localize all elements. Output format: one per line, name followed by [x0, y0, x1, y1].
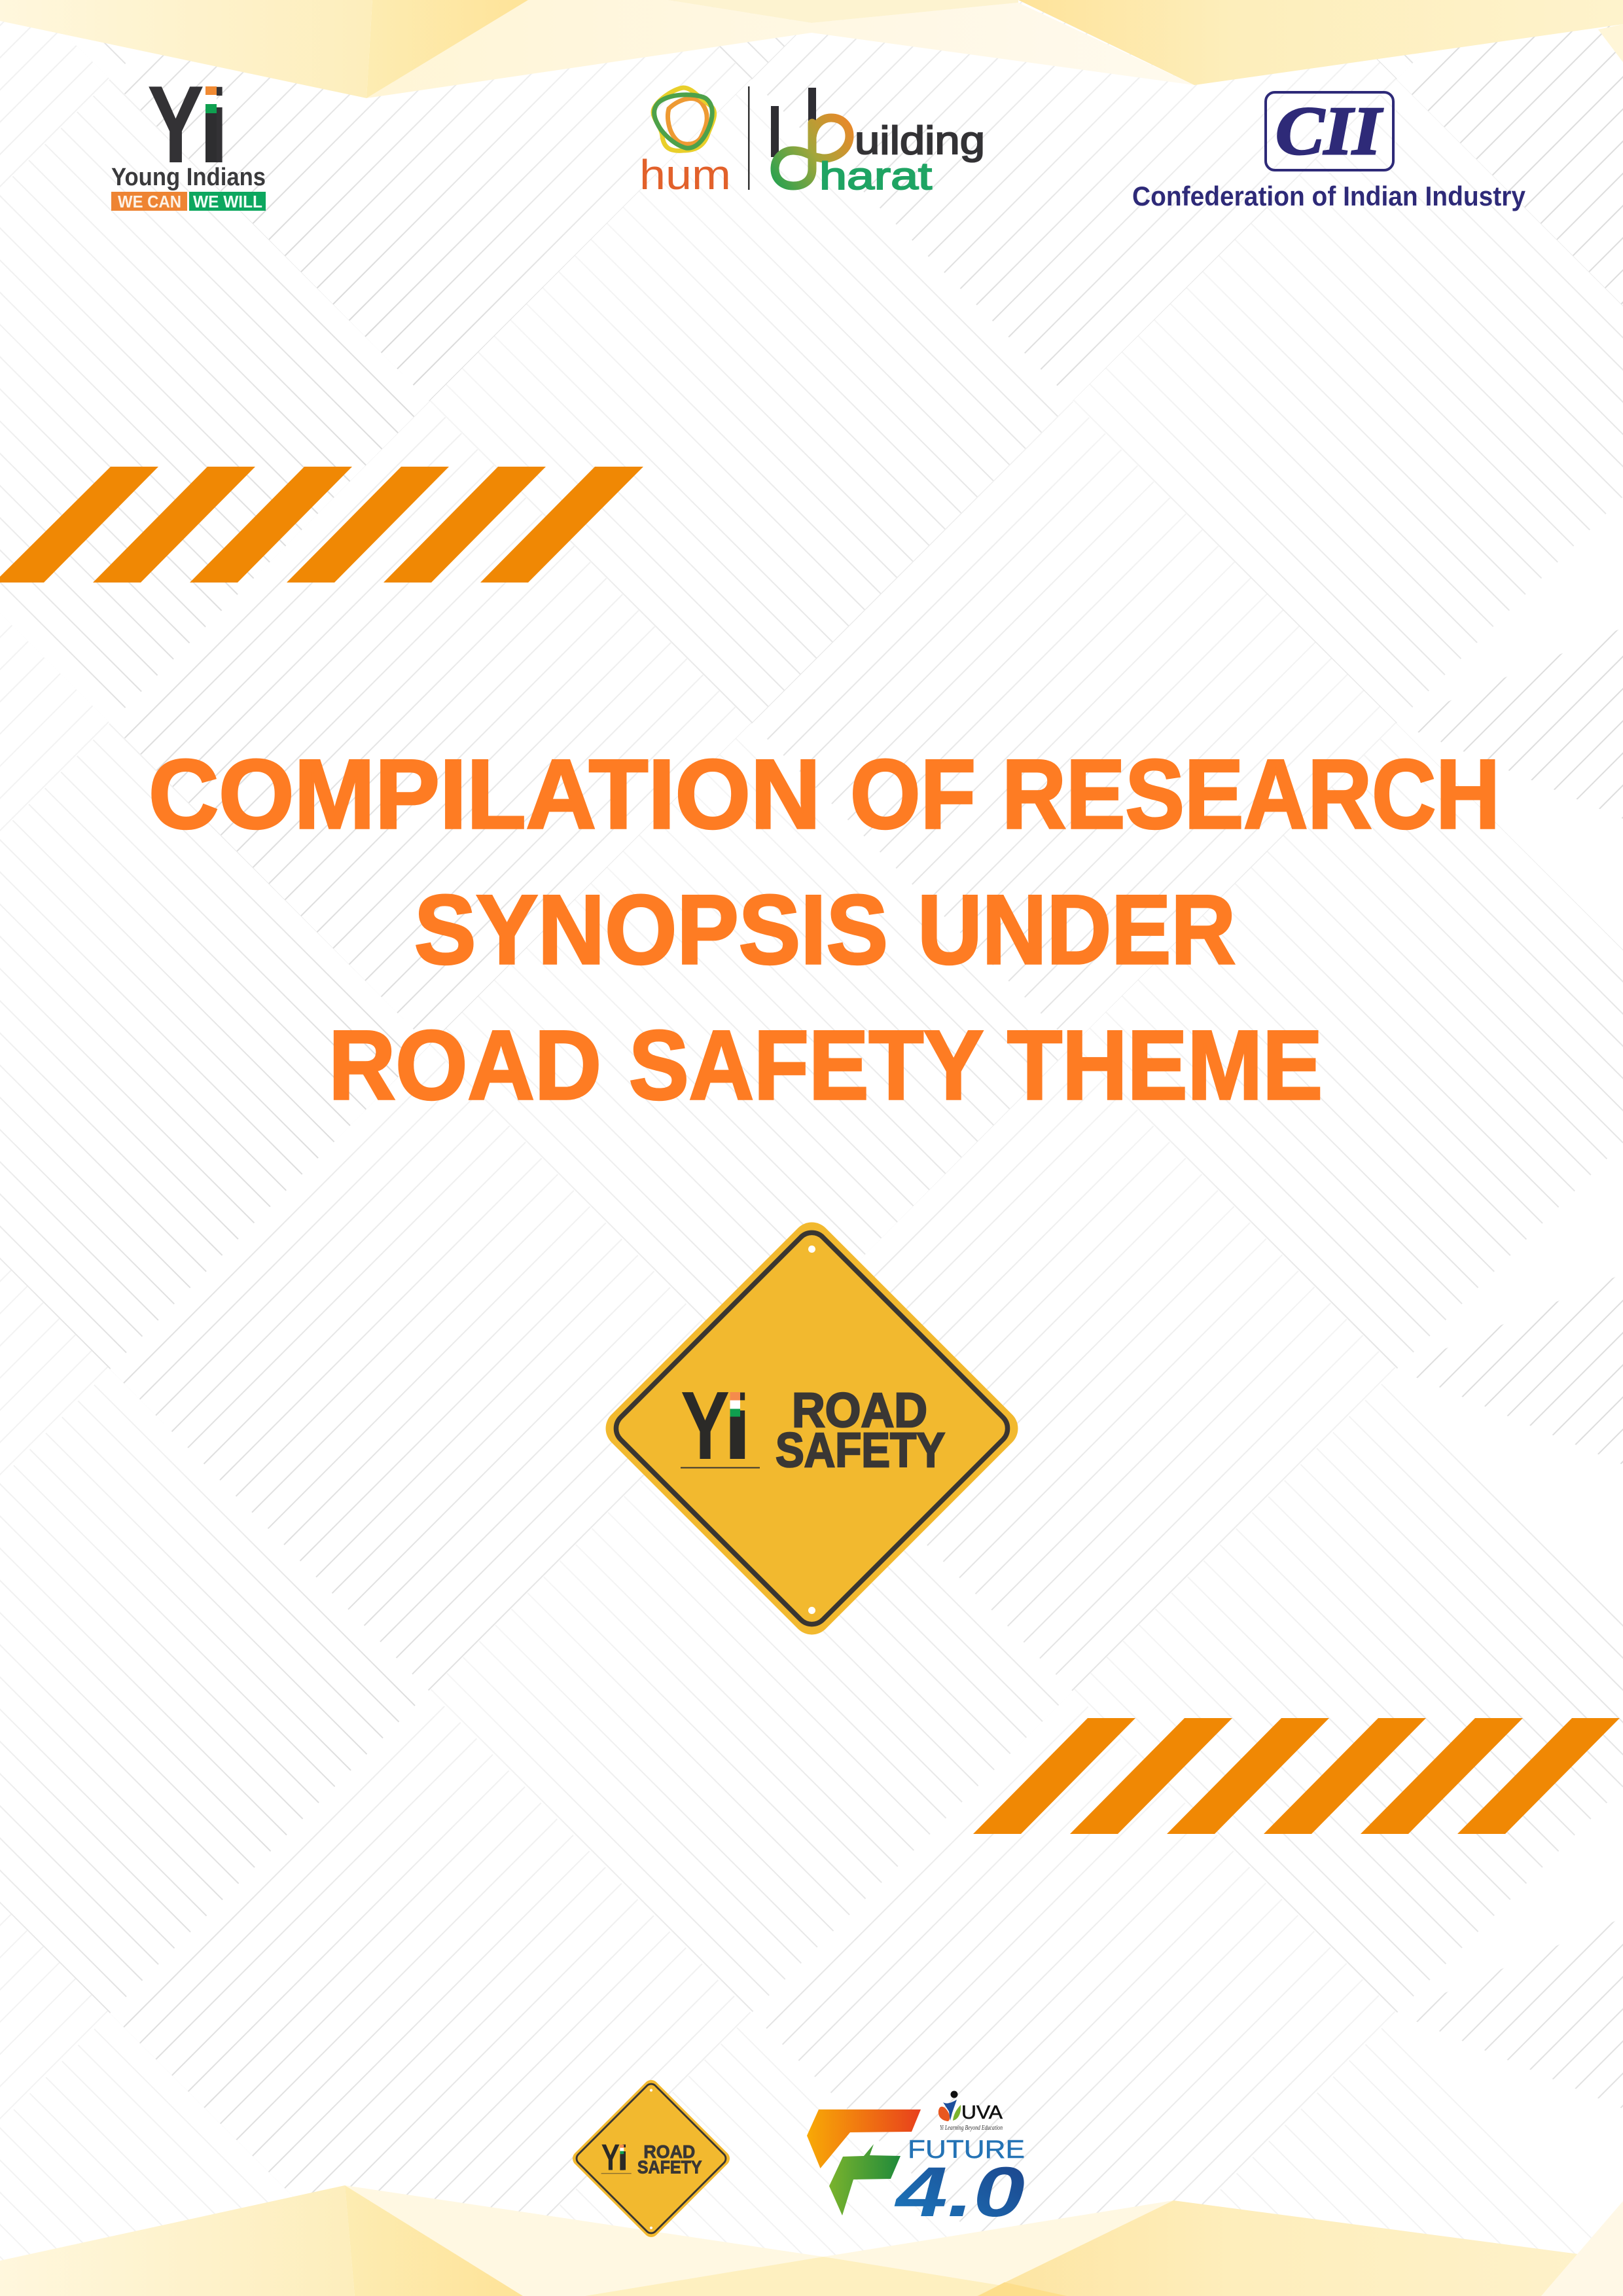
small road safety sign logo: i — [620, 2140, 628, 2178]
hazard stripes: bottom right — [973, 1718, 1620, 1834]
logo: Young Indians — [111, 63, 266, 211]
title: SYNOPSIS — [414, 874, 888, 984]
logo: Future 4.0 with Yuva — [807, 2090, 1025, 2231]
logo: Confederation of Indian Industry — [1132, 92, 1526, 211]
logo: Young Indians: Young Indians — [111, 164, 266, 191]
title: ROAD — [329, 1010, 601, 1120]
title: OF — [850, 739, 976, 849]
logo: Young Indians: WE CAN — [118, 192, 181, 211]
small road safety sign logo: ROAD — [643, 2141, 695, 2162]
sign: road safety text — [776, 1383, 945, 1477]
top yellow faceted band — [0, 0, 1623, 98]
title: THEME — [1007, 1010, 1323, 1120]
title: SAFETY — [629, 1010, 984, 1120]
logo: Confederation of Indian Industry: CII — [1275, 92, 1383, 169]
logo: Future 4.0 with Yuva: 4.0 — [894, 2152, 1025, 2231]
hazard stripes: top left — [0, 467, 643, 583]
small road safety sign logo — [569, 2077, 733, 2240]
title: RESEARCH — [1002, 739, 1500, 849]
bottom yellow faceted band — [0, 2185, 1623, 2296]
title: UNDER — [918, 874, 1236, 984]
yuva mark: Yi Learning Beyond Education — [940, 2125, 1003, 2132]
title — [149, 739, 1500, 1120]
logo: Young Indians: Y — [147, 63, 204, 186]
logo: hum Building Bharat: uilding — [855, 118, 985, 162]
icon: hum rings — [653, 88, 715, 151]
icon: orange and green F mark — [807, 2109, 921, 2215]
small road safety sign logo: Y — [601, 2137, 620, 2178]
sign: road safety text: SAFETY — [776, 1423, 945, 1477]
small road safety sign logo: SAFETY — [637, 2156, 702, 2177]
logo: hum Building Bharat: harat — [819, 155, 932, 198]
logo: hum Building Bharat — [639, 86, 985, 198]
logo: Future 4.0 with Yuva: FUTURE — [908, 2136, 1025, 2164]
logo: Confederation of Indian Industry: Confederation of Indian Industry — [1132, 181, 1526, 211]
yuva mark: UVA — [961, 2102, 1003, 2123]
title: COMPILATION — [149, 739, 821, 849]
sign: Yi mark: i — [730, 1376, 751, 1479]
logo: hum Building Bharat: hum — [639, 151, 731, 198]
yuva mark — [938, 2090, 1003, 2132]
logo: Young Indians: i — [206, 68, 229, 185]
sign: road safety text: ROAD — [792, 1383, 927, 1437]
road safety diamond sign — [597, 1214, 1026, 1643]
logo: Young Indians: WE WILL — [193, 192, 262, 211]
sign: Yi mark: Y — [681, 1372, 730, 1480]
